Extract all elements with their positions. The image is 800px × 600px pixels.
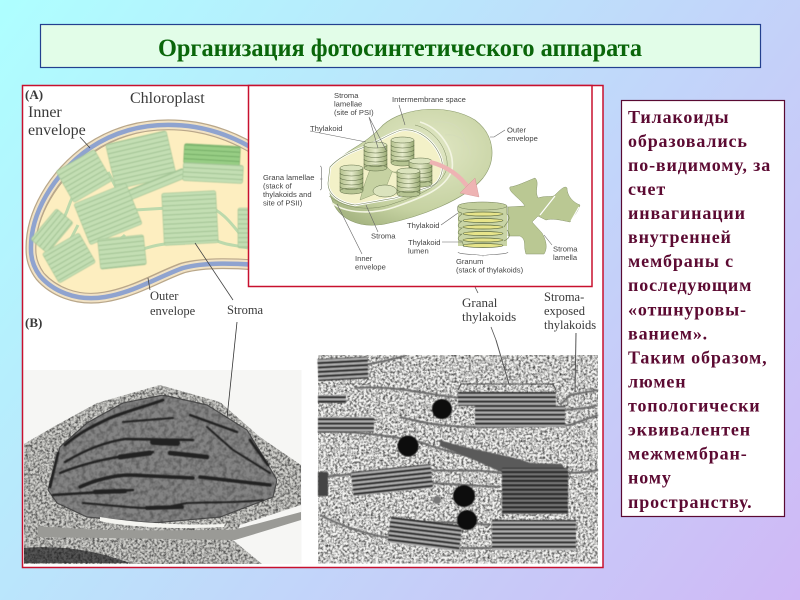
chloroplast body <box>48 395 277 523</box>
text panel: thylakoid origin explanation: по-видимому, за <box>628 155 771 175</box>
text panel: thylakoid origin explanation: пространству. <box>628 492 752 512</box>
figure panel <box>22 86 603 568</box>
label: Stroma: Stroma <box>227 303 264 317</box>
inset labels: thylakoids and <box>263 190 312 199</box>
inset labels: (stack of <box>263 182 293 190</box>
inset labels: Intermembrane space <box>392 95 466 104</box>
title <box>40 24 760 68</box>
label: Stroma-exposed thylakoids: Stroma- <box>544 290 584 304</box>
thylakoid stacks <box>317 357 576 551</box>
inset labels: Stroma <box>371 232 396 240</box>
inset labels: Thylakoid <box>407 221 440 230</box>
thylakoid grana stacks <box>31 131 262 283</box>
chloroplast envelope <box>31 125 270 298</box>
text panel: thylakoid origin explanation: ванием». <box>628 324 708 344</box>
inset labels: Stroma <box>334 91 359 100</box>
text panel: thylakoid origin explanation: Тилакоиды <box>628 107 729 127</box>
text panel: thylakoid origin explanation: счет <box>628 179 666 199</box>
inset labels: lumen <box>408 246 429 256</box>
inset leaders and brackets <box>310 105 552 256</box>
grana cylinders <box>364 142 387 171</box>
3D chloroplast body <box>328 109 492 225</box>
label: Stroma-exposed thylakoids: exposed <box>544 304 586 318</box>
inset labels: site of PSII) <box>263 198 303 208</box>
dark grana streaks <box>50 400 270 508</box>
inset labels: Outer <box>507 126 526 134</box>
inset labels: lamellae <box>334 100 362 108</box>
text panel: thylakoid origin explanation: топологически <box>628 396 761 416</box>
panel B left: electron micrograph of a chloroplast <box>24 322 302 564</box>
label: Stroma-exposed thylakoids: thylakoids <box>544 318 596 332</box>
inner lamellae sheet <box>360 150 412 200</box>
text panel: thylakoid origin explanation: мембраны с <box>628 251 734 271</box>
label: Inner envelope: envelope <box>28 122 86 139</box>
text panel: thylakoid origin explanation: межмембран- <box>628 444 748 464</box>
inset labels: Thylakoid <box>408 238 440 247</box>
inset labels: Stroma <box>553 244 578 254</box>
label: Granal thylakoids: Granal <box>462 295 497 310</box>
leader line: stroma <box>227 322 237 418</box>
text panel: thylakoid origin explanation: эквивалентен <box>628 420 751 440</box>
panel B right: micrograph of thylakoid membranes <box>317 333 598 564</box>
inset labels: Inner <box>355 254 373 263</box>
inset labels: Grana lamellae <box>263 173 314 182</box>
dark lower cell <box>24 547 130 563</box>
leader lines <box>80 137 233 300</box>
label: Inner envelope: Inner <box>28 104 62 121</box>
text panel: thylakoid origin explanation: ному <box>628 468 672 488</box>
text panel: thylakoid origin explanation: инвагинации <box>628 203 746 223</box>
stroma-exposed leader <box>575 333 576 392</box>
label: Outer envelope: Outer <box>150 289 178 303</box>
title: Организация фотосинтетического аппарата <box>158 35 642 62</box>
text panel: thylakoid origin explanation: последующим <box>628 275 752 295</box>
cell wall band <box>38 512 301 540</box>
inset labels <box>263 91 578 274</box>
enlarged granum <box>458 202 509 248</box>
label: (B): (B) <box>25 315 42 330</box>
inset labels: (stack of thylakoids) <box>456 266 524 274</box>
inset labels: (site of PSI) <box>334 108 374 117</box>
inset labels: Thylakoid <box>310 124 342 133</box>
inset panel: chloroplast 3D diagram <box>248 86 592 286</box>
text panel: thylakoid origin explanation: «отшнуровы- <box>628 300 747 320</box>
inset labels: lamella <box>553 253 578 262</box>
granal bracket and leader <box>458 340 556 390</box>
label: Granal thylakoids: thylakoids <box>462 309 516 324</box>
text panel: thylakoid origin explanation: люмен <box>628 372 686 392</box>
dark diagonal band <box>440 440 570 478</box>
membrane bands <box>318 356 598 548</box>
leader: granal top <box>475 287 496 340</box>
cutaway interior <box>328 130 442 205</box>
inset labels: envelope <box>355 262 386 272</box>
label: Outer envelope: envelope <box>150 304 196 318</box>
text panel: thylakoid origin explanation: внутренней <box>628 227 732 247</box>
inset labels: envelope <box>507 134 538 143</box>
inset labels: Granum <box>456 257 483 266</box>
enlarged stroma lamella <box>508 178 580 254</box>
text panel: thylakoid origin explanation <box>622 100 784 516</box>
label: (A): (A) <box>25 87 43 102</box>
panel A: chloroplast cross-section diagram <box>25 87 270 330</box>
cytoplasm rim <box>24 385 301 564</box>
pink arrow <box>430 162 479 197</box>
text panel: thylakoid origin explanation: Таким образом, <box>628 348 768 368</box>
text panel: thylakoid origin explanation: образовались <box>628 131 748 151</box>
dark granules <box>398 399 477 530</box>
label: Chloroplast: Chloroplast <box>130 90 205 107</box>
stroma lamellae connectors <box>60 172 248 260</box>
